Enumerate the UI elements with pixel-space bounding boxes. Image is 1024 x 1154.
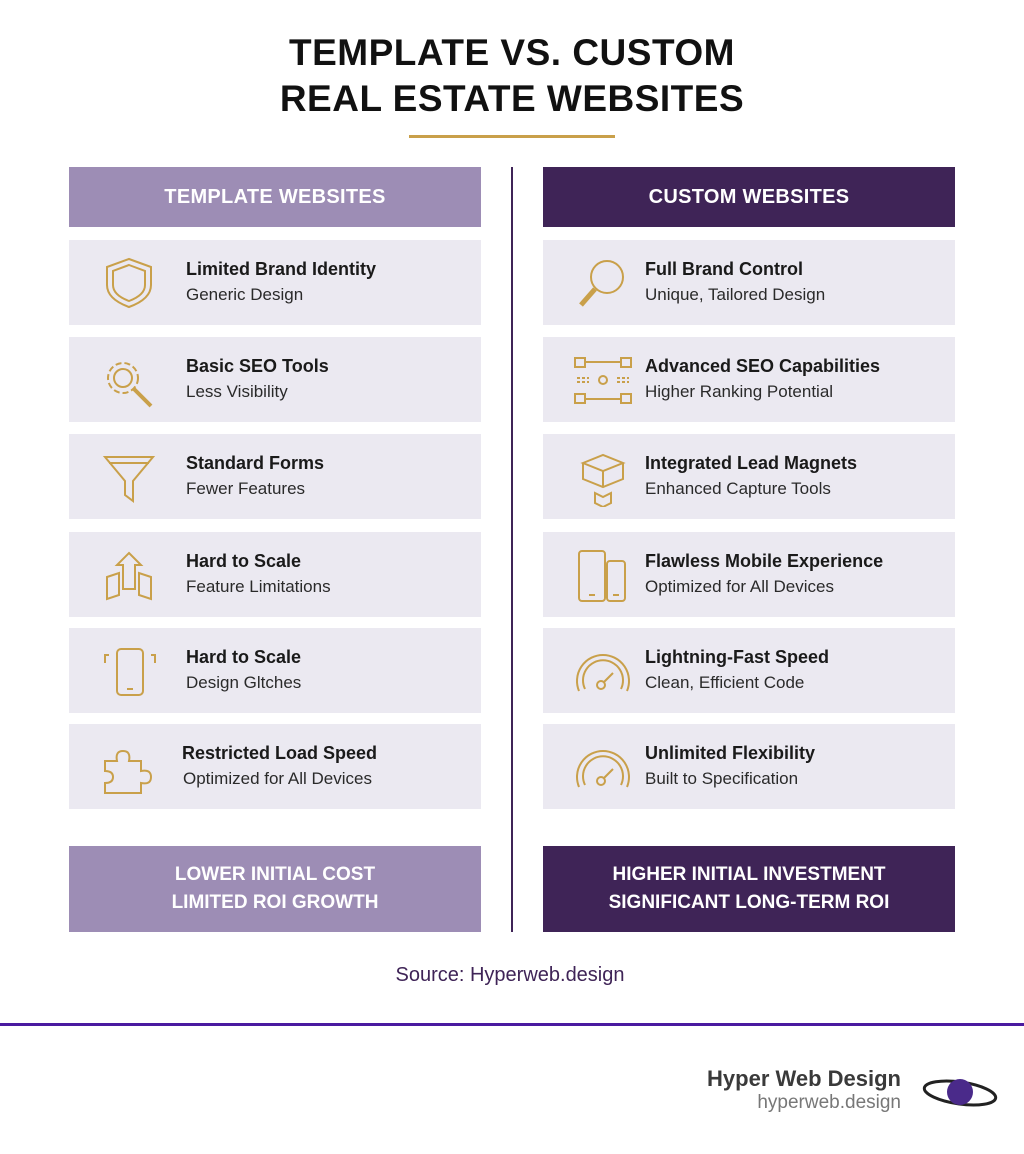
row: basic seo: Less Visibility <box>186 382 288 401</box>
footer box: custom: SIGNIFICANT LONG-TERM ROI <box>609 892 889 913</box>
row: hard to scale 1: Feature Limitations <box>186 577 331 596</box>
header: custom: CUSTOM WEBSITES <box>649 186 849 208</box>
logo <box>922 1079 998 1106</box>
brand text: Hyper Web Design <box>707 1066 901 1091</box>
row: advanced seo: Advanced SEO Capabilities <box>645 356 880 376</box>
row: hard to scale 1: Hard to Scale <box>186 551 301 571</box>
brand text: hyperweb.design <box>757 1092 901 1113</box>
row: hard to scale 1 <box>69 532 481 617</box>
icon: magnifier <box>579 260 624 307</box>
center divider <box>511 167 513 932</box>
row: flexibility <box>543 724 955 809</box>
purple rule <box>0 1023 1024 1026</box>
row: full brand control: Unique, Tailored Design <box>645 285 825 304</box>
icon: scale arrow <box>106 552 152 600</box>
icon: funnel <box>103 456 155 503</box>
header: template: TEMPLATE WEBSITES <box>164 186 386 208</box>
gold underline <box>409 135 615 138</box>
row: speed: Clean, Efficient Code <box>645 673 804 692</box>
row: restricted load speed: Optimized for All Devices <box>183 769 372 788</box>
row: mobile <box>543 532 955 617</box>
row: advanced seo <box>543 337 955 422</box>
header: custom <box>543 167 955 227</box>
brand text <box>707 1066 901 1113</box>
row: restricted load speed: Restricted Load Speed <box>182 743 377 763</box>
icon: devices <box>578 550 626 602</box>
row: standard forms: Fewer Features <box>186 479 305 498</box>
row: limited brand identity: Limited Brand Identity <box>186 259 376 279</box>
row: standard forms: Standard Forms <box>186 453 324 473</box>
footer box: template <box>69 846 481 932</box>
footer box: template: LOWER INITIAL COST <box>175 864 375 885</box>
row: hard to scale 2: Hard to Scale <box>186 647 301 667</box>
icon: box <box>580 454 626 507</box>
icon: nodes <box>574 357 632 404</box>
footer box: custom <box>543 846 955 932</box>
row: speed <box>543 628 955 713</box>
row: full brand control <box>543 240 955 325</box>
header: template <box>69 167 481 227</box>
row: basic seo <box>69 337 481 422</box>
row: advanced seo: Higher Ranking Potential <box>645 382 833 401</box>
icon: gauge <box>576 654 630 692</box>
row: lead magnets <box>543 434 955 519</box>
icon: phone <box>104 648 156 696</box>
row: lead magnets: Integrated Lead Magnets <box>645 453 857 473</box>
footer box: custom: HIGHER INITIAL INVESTMENT <box>612 864 886 885</box>
source: Source: Hyperweb.design <box>395 964 624 986</box>
row: restricted load speed <box>69 724 481 809</box>
row: basic seo: Basic SEO Tools <box>186 356 329 376</box>
title: REAL ESTATE WEBSITES <box>280 78 744 119</box>
row: hard to scale 2 <box>69 628 481 713</box>
row: hard to scale 2: Design Gltches <box>186 673 301 692</box>
row: mobile: Flawless Mobile Experience <box>645 551 883 571</box>
row: flexibility: Built to Specification <box>645 769 798 788</box>
title: TEMPLATE VS. CUSTOM <box>289 32 735 73</box>
row: speed: Lightning-Fast Speed <box>645 647 829 667</box>
row: limited brand identity <box>69 240 481 325</box>
footer box: template: LIMITED ROI GROWTH <box>172 892 378 913</box>
row: full brand control: Full Brand Control <box>645 259 803 279</box>
row: mobile: Optimized for All Devices <box>645 577 834 596</box>
row: flexibility: Unlimited Flexibility <box>645 743 815 763</box>
row: limited brand identity: Generic Design <box>186 285 303 304</box>
icon: puzzle <box>104 750 152 794</box>
icon: shield <box>106 258 152 308</box>
title <box>280 32 744 119</box>
icon: gear magnifier <box>107 362 152 408</box>
icon: gauge <box>576 750 630 788</box>
row: standard forms <box>69 434 481 519</box>
row: lead magnets: Enhanced Capture Tools <box>645 479 831 498</box>
